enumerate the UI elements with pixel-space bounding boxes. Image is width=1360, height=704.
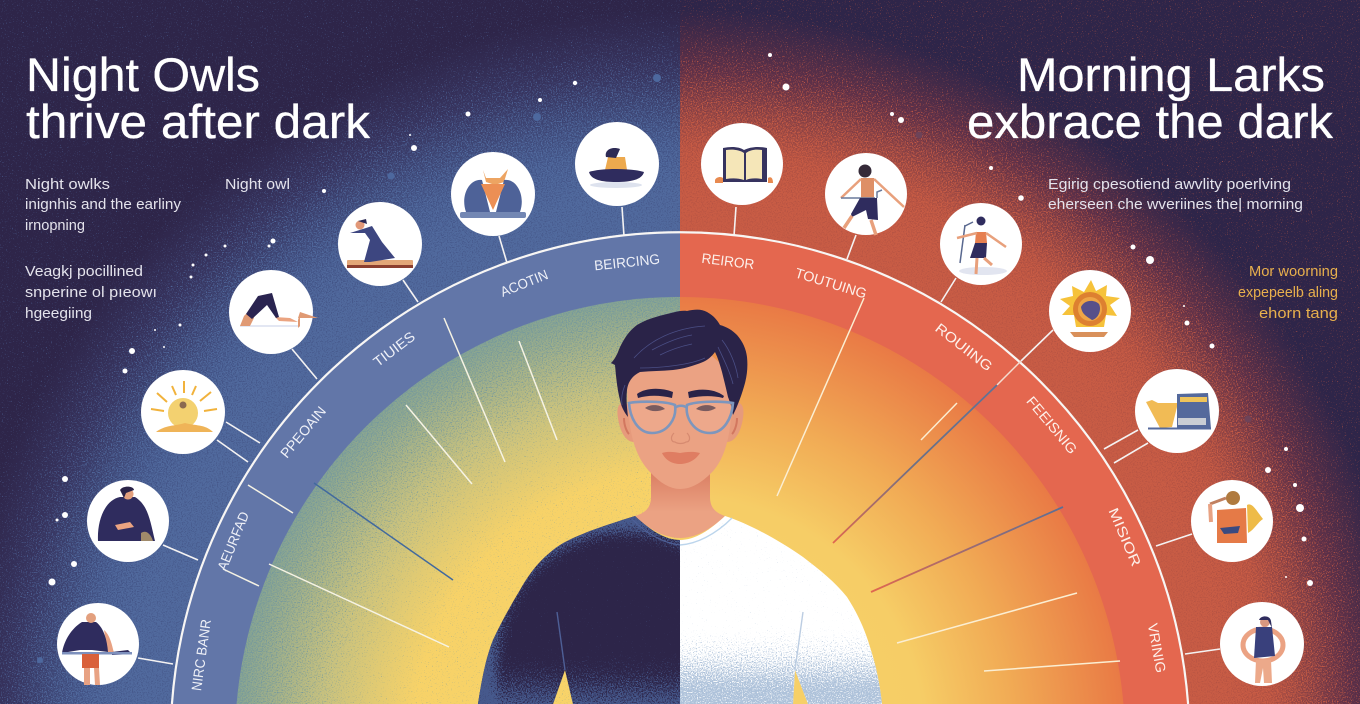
text block: night owl detail: snperine ol pıeowı	[25, 284, 157, 301]
icon: kneeling figure	[338, 202, 422, 286]
person	[478, 310, 882, 704]
connector lines to activity circles	[138, 207, 1220, 664]
band labels: morning side: MISIOR	[1106, 505, 1144, 569]
icon: sunburst	[1049, 270, 1131, 352]
text block: morning lark highlight: Mor woorning	[1249, 263, 1338, 280]
title: night owls: Night Owls	[26, 48, 260, 101]
title: morning larks: Morning Larks	[1017, 48, 1325, 101]
icon: downward dog	[229, 270, 318, 354]
text block: morning lark description: eherseen che wveriines the| morning	[1048, 196, 1303, 213]
band labels: morning side: TOUTUING	[793, 265, 869, 301]
icon: seated figure with orange shorts	[57, 603, 139, 685]
icon: hands	[451, 152, 535, 236]
icon: open book	[701, 123, 783, 205]
text block: night owl description: irnopning	[25, 217, 85, 234]
band labels: morning side: FEEISNIG	[1023, 393, 1081, 457]
shirt: white morning half	[680, 516, 882, 704]
nose	[671, 433, 690, 444]
band labels: morning side	[701, 250, 1169, 674]
hair	[611, 310, 747, 417]
band labels: night side: TIUIES	[370, 328, 418, 370]
arc band: morning side	[680, 233, 1188, 704]
icon: seated figure	[87, 480, 169, 562]
text block: morning lark highlight: ehorn tang	[1259, 305, 1338, 322]
band labels: night side: AEURFAD	[214, 509, 252, 573]
text block: morning lark highlight	[1238, 263, 1338, 322]
band labels: night side: NIRC BANR	[188, 618, 214, 692]
band labels: morning side: REIROR	[701, 250, 755, 272]
subtitle: exbrace the dark: exbrace the dark	[967, 95, 1334, 148]
text block: night owl detail: Veagkj pocillined	[25, 263, 143, 280]
band labels: night side	[188, 251, 661, 692]
text block: night owl description	[25, 176, 182, 234]
icon: bowl	[575, 122, 659, 206]
ears	[617, 403, 744, 442]
text block: night owl tag: Night owl	[225, 176, 290, 193]
subtitle: thrive after dark: thrive after dark	[26, 95, 371, 148]
eyebrows	[637, 389, 724, 398]
eyes	[645, 405, 716, 411]
band labels: night side: BEIRCING	[593, 251, 661, 273]
glasses	[629, 402, 733, 433]
band labels: night side: ACOTIN	[498, 266, 550, 300]
icon: figure with yellow cloth	[1191, 480, 1273, 562]
icon: figure with ring	[1220, 602, 1304, 686]
band labels: night side: PPEOAIN	[277, 403, 329, 461]
activity circles: night side	[57, 122, 659, 685]
face	[627, 345, 733, 489]
stars: left	[37, 74, 661, 663]
band labels: morning side: VRINIG	[1145, 622, 1169, 674]
stars: right	[768, 53, 1313, 586]
text block: night owl detail: hgeegiing	[25, 305, 92, 322]
text block: morning lark description: Egirig cpesotiend awvlity poerlving	[1048, 176, 1291, 193]
text block: night owl description: inignhis and the earliny	[25, 196, 182, 213]
inner radial lines: morning side	[777, 298, 1120, 671]
icon: figure with stick	[825, 153, 907, 235]
text block: morning lark highlight: expepeelb aling	[1238, 284, 1338, 301]
outer arc line	[172, 232, 1188, 704]
mouth	[662, 452, 700, 464]
text block: night owl detail	[25, 263, 157, 322]
icon: folder and ledger	[1135, 369, 1219, 453]
neck	[635, 465, 725, 538]
arc band: night side	[173, 234, 680, 704]
text block: night owl description: Night owlks	[25, 176, 110, 193]
activity circles: morning side	[701, 123, 1304, 686]
inner radial lines: night side	[223, 318, 557, 647]
icon: dancer with pole	[940, 203, 1022, 285]
text block: morning lark description	[1048, 176, 1303, 213]
band labels: morning side: ROUIING	[932, 320, 996, 374]
shirt: dark night half	[478, 516, 680, 704]
icon: sun orb	[141, 370, 225, 454]
